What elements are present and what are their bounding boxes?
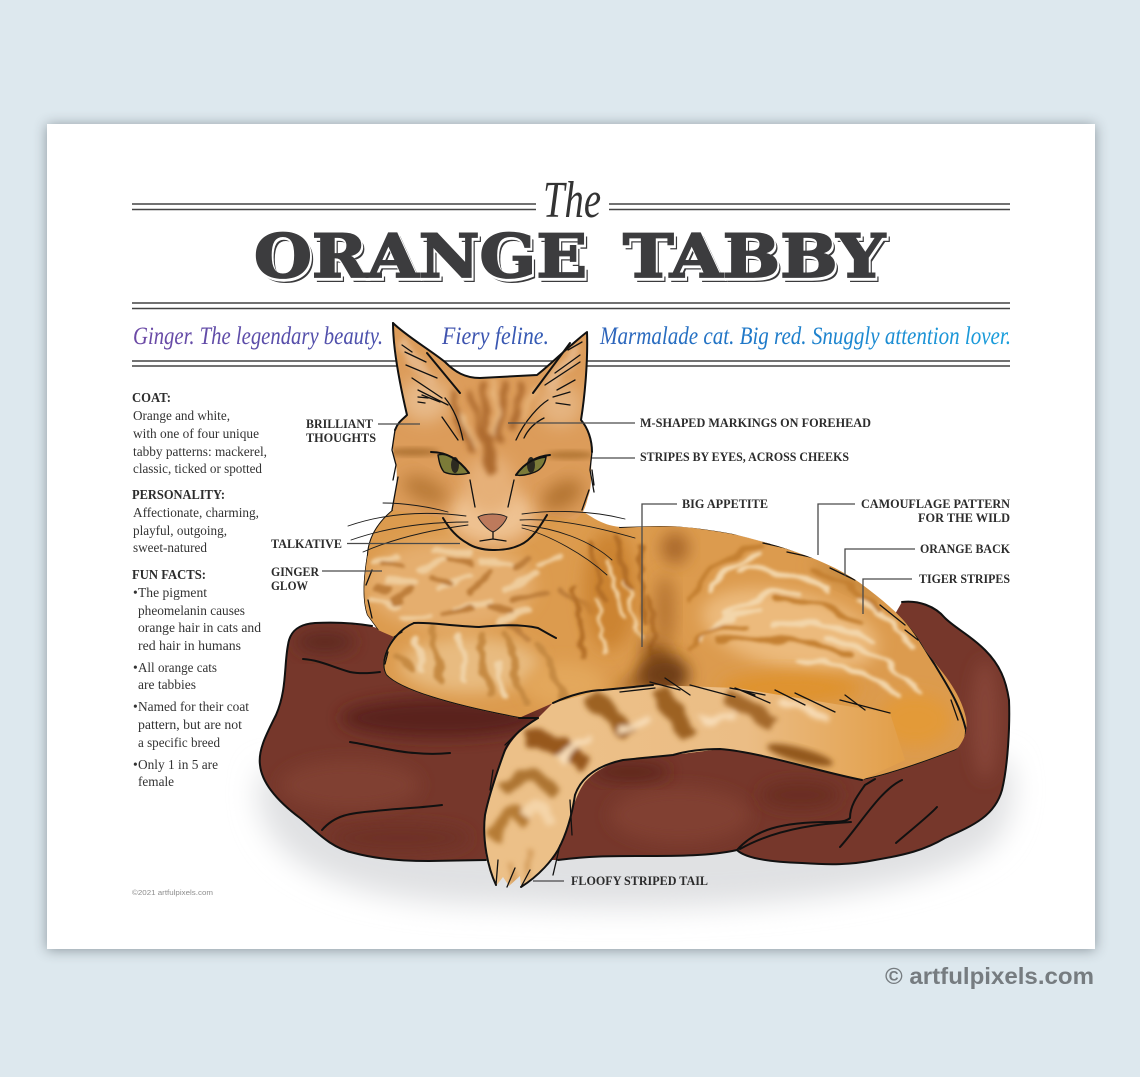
fun facts text: Only 1 in 5 are bbox=[138, 757, 218, 772]
watermark: © artfulpixels.com bbox=[885, 963, 1094, 989]
title: Orange Tabby: TABBY bbox=[626, 226, 889, 296]
coat text: classic, ticked or spotted bbox=[133, 461, 262, 476]
callout: camouflage pattern bbox=[818, 497, 1010, 555]
nose and mouth bbox=[478, 514, 507, 532]
eye: left bbox=[438, 454, 469, 474]
callout: tiger stripes bbox=[863, 572, 1010, 614]
body outlines bbox=[367, 510, 392, 555]
callout: ginger glow: GINGER bbox=[271, 565, 320, 579]
callout: ginger glow bbox=[271, 565, 382, 593]
flank bbox=[696, 582, 884, 675]
chest mottling bbox=[365, 530, 951, 746]
ground shadow bbox=[258, 760, 1013, 908]
fun facts text: female bbox=[138, 774, 174, 789]
callout: camouflage pattern: CAMOUFLAGE PATTERN bbox=[861, 497, 1010, 511]
callout: talkative: TALKATIVE bbox=[271, 537, 342, 551]
tagline: Fiery feline. bbox=[441, 323, 549, 350]
fun facts text: are tabbies bbox=[138, 677, 196, 692]
title: Orange Tabby: ORANGE bbox=[255, 224, 588, 294]
leg stripes bbox=[400, 637, 540, 693]
cat body bbox=[132, 323, 1094, 989]
fun facts text: • bbox=[133, 585, 138, 600]
fun facts text: pattern, but are not bbox=[138, 717, 242, 732]
title: Orange Tabby: TABBY bbox=[624, 224, 887, 294]
fun facts text bbox=[132, 567, 261, 789]
callout: brilliant thoughts: BRILLIANT bbox=[306, 417, 374, 431]
eye: right bbox=[516, 457, 546, 475]
callout: brilliant thoughts: THOUGHTS bbox=[306, 431, 376, 445]
fun facts text: The pigment bbox=[138, 585, 207, 600]
tagline: Ginger. The legendary beauty. bbox=[133, 323, 383, 350]
poster card bbox=[47, 124, 1095, 949]
personality text bbox=[132, 487, 259, 555]
personality text: PERSONALITY: bbox=[132, 487, 225, 502]
fun facts text: • bbox=[133, 757, 138, 772]
callout: big appetite bbox=[642, 497, 768, 647]
coat text: tabby patterns: mackerel, bbox=[133, 444, 267, 459]
fun facts text: All orange cats bbox=[138, 660, 217, 675]
title: The: The bbox=[543, 172, 601, 229]
callout: floofy striped tail: FLOOFY STRIPED TAIL bbox=[571, 874, 708, 888]
callout: tiger stripes: TIGER STRIPES bbox=[919, 572, 1010, 586]
fun facts text: • bbox=[133, 660, 138, 675]
fun facts text: pheomelanin causes bbox=[138, 603, 245, 618]
cat bed bbox=[260, 602, 1009, 864]
personality text: playful, outgoing, bbox=[133, 523, 227, 538]
coat text: Orange and white, bbox=[133, 408, 230, 423]
body crease bbox=[610, 640, 678, 690]
tagline: Marmalade cat. Big red. Snuggly attention lover. bbox=[599, 323, 1011, 350]
title: Orange Tabby: ORANGE bbox=[254, 222, 587, 292]
callout: big appetite: BIG APPETITE bbox=[682, 497, 768, 511]
callout: stripes by eyes: STRIPES BY EYES, ACROSS CHEEKS bbox=[640, 450, 849, 464]
fun facts text: Named for their coat bbox=[138, 699, 249, 714]
callout: ginger glow: GLOW bbox=[271, 579, 308, 593]
whiskers bbox=[348, 503, 635, 575]
callout: brilliant thoughts bbox=[306, 417, 420, 445]
fun facts text: FUN FACTS: bbox=[132, 567, 206, 582]
callout: camouflage pattern: FOR THE WILD bbox=[918, 511, 1010, 525]
coat text: with one of four unique bbox=[133, 426, 259, 441]
fun facts text: • bbox=[133, 699, 138, 714]
coat text: COAT: bbox=[132, 390, 171, 405]
fun facts text: red hair in humans bbox=[138, 638, 241, 653]
title: Orange Tabby: TABBY bbox=[623, 222, 886, 292]
fun facts text: orange hair in cats and bbox=[138, 620, 261, 635]
copyright: ©2021 artfulpixels.com bbox=[132, 889, 213, 897]
callout: m-shaped markings: M-SHAPED MARKINGS ON FOREHEAD bbox=[640, 416, 871, 430]
callout: orange back bbox=[845, 542, 1010, 576]
callout: orange back: ORANGE BACK bbox=[920, 542, 1010, 556]
personality text: Affectionate, charming, bbox=[133, 505, 259, 520]
cat head bbox=[387, 323, 594, 550]
personality text: sweet-natured bbox=[133, 540, 207, 555]
title: Orange Tabby: ORANGE bbox=[257, 226, 590, 296]
cat tail bbox=[484, 678, 905, 887]
title: Orange Tabby bbox=[254, 222, 889, 296]
tagline bbox=[132, 303, 1011, 366]
coat text bbox=[132, 390, 267, 476]
fun facts text: a specific breed bbox=[138, 735, 220, 750]
shoulder streaks bbox=[584, 530, 636, 650]
